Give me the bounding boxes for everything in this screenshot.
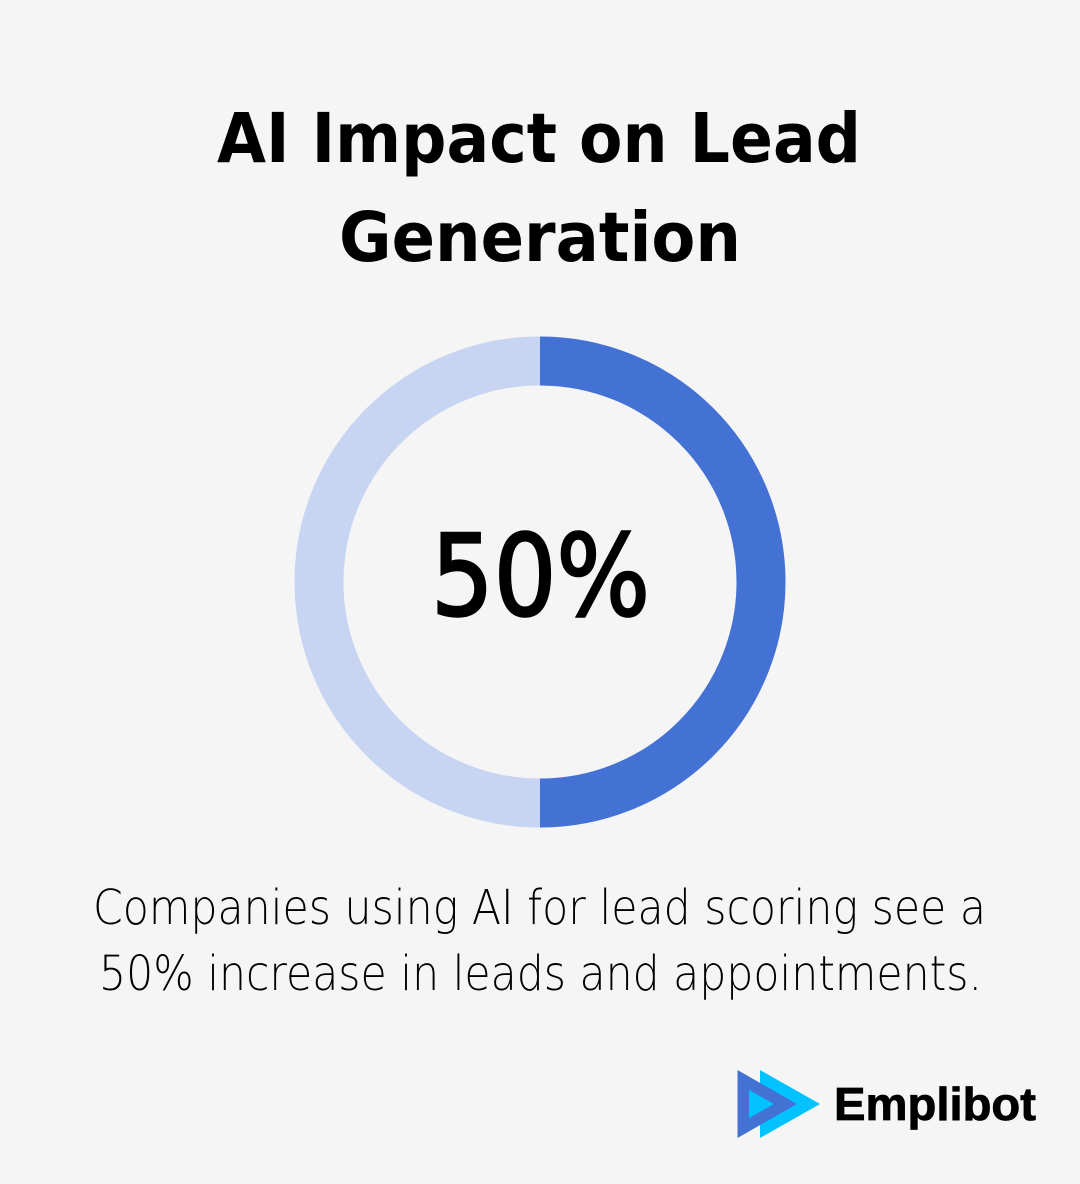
title: AI Impact on Lead: [217, 99, 861, 179]
title: Generation: [339, 198, 741, 278]
logo: Emplibot: [738, 1070, 1036, 1138]
description text: [93, 880, 986, 1002]
wordmark: Emplibot: [834, 1078, 1036, 1130]
donut chart: [319, 361, 761, 803]
description text: Companies using AI for lead scoring see a: [93, 880, 986, 936]
title: [217, 99, 861, 278]
donut value: 50%: [431, 512, 650, 642]
description text: 50% increase in leads and appointments.: [99, 946, 982, 1002]
icon: play triangles: [738, 1070, 820, 1138]
